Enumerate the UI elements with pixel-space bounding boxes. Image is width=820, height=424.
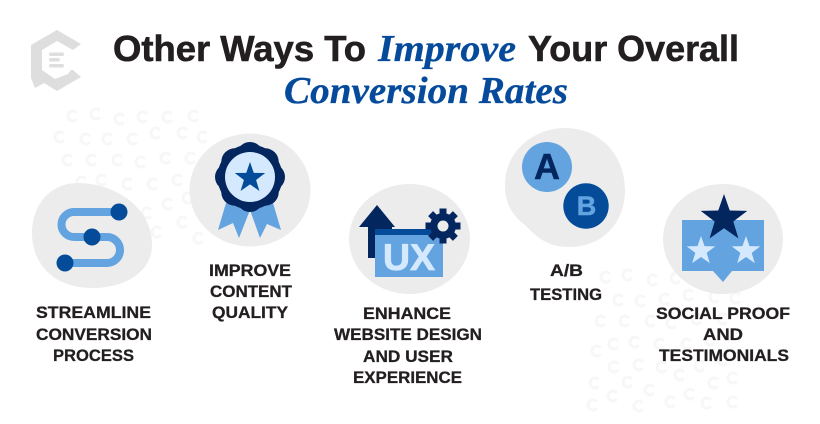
label: enhance website design and user experience: EXPERIENCE (353, 368, 462, 387)
label: social proof and testimonials: AND (703, 325, 743, 344)
label: social proof and testimonials: SOCIAL PROOF (656, 304, 790, 323)
label: improve content quality (209, 261, 293, 322)
title: Your Overall (528, 28, 739, 69)
label: streamline conversion process (36, 303, 152, 365)
label: A/B testing (530, 261, 602, 304)
icon: A and B circles (505, 128, 625, 247)
label: enhance website design and user experience: AND USER (363, 347, 453, 366)
icon: connected S path (32, 183, 152, 288)
icon: A and B circles: B (577, 191, 596, 221)
label: improve content quality: QUALITY (212, 303, 289, 322)
icon: speech bubble with stars (663, 184, 783, 294)
icon: UX window with arrow and gear (349, 184, 470, 294)
title: Improve (377, 28, 516, 70)
label: enhance website design and user experience: WEBSITE DESIGN (334, 325, 482, 344)
label: social proof and testimonials (656, 304, 790, 365)
label: social proof and testimonials: TESTIMONIALS (659, 346, 789, 365)
title: Conversion Rates (284, 70, 568, 112)
icon: award rosette (190, 134, 310, 246)
label: streamline conversion process: PROCESS (53, 346, 134, 365)
icon: UX window with arrow and gear: UX (383, 237, 435, 278)
label: improve content quality: CONTENT (210, 282, 293, 301)
panel: streamline conversion process (32, 183, 152, 365)
label: enhance website design and user experience: ENHANCE (363, 304, 451, 323)
panel: improve content quality (190, 134, 310, 322)
title (113, 28, 739, 112)
label: A/B testing: TESTING (530, 285, 602, 304)
label: streamline conversion process: CONVERSION (36, 325, 152, 344)
label: enhance website design and user experience (334, 304, 482, 387)
icon: A and B circles: A (534, 146, 560, 187)
panel: A/B testing (505, 128, 625, 304)
title: Other Ways To (113, 28, 366, 69)
panel: enhance website design and user experience (334, 184, 482, 387)
label: A/B testing: A/B (550, 261, 583, 280)
label: improve content quality: IMPROVE (209, 261, 291, 280)
panel: social proof and testimonials (656, 184, 790, 365)
label: streamline conversion process: STREAMLINE (36, 303, 151, 322)
icon: brand logo (31, 30, 81, 91)
